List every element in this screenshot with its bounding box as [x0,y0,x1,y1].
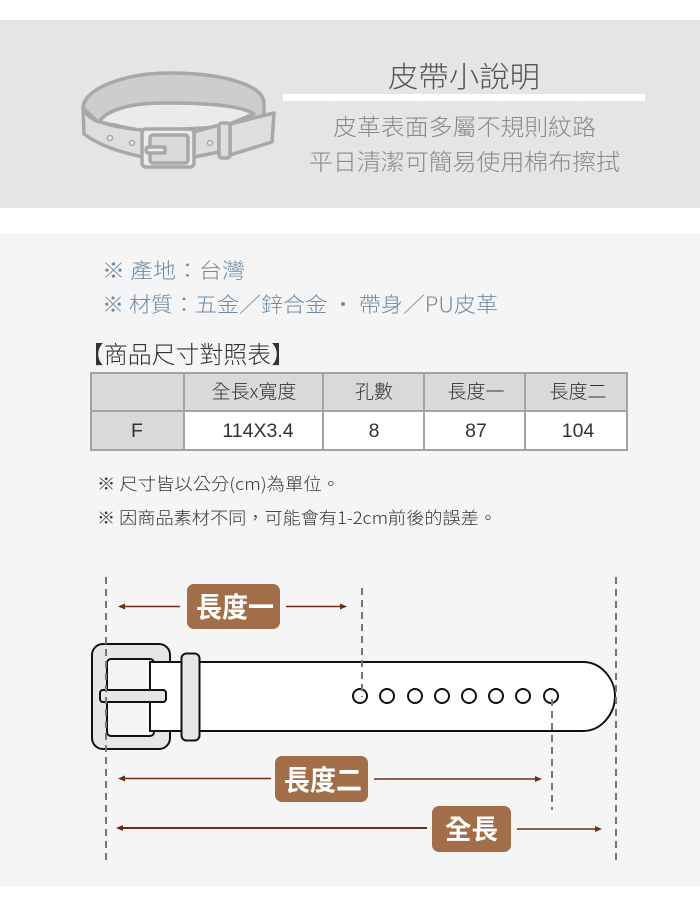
icon: buckle [92,644,170,749]
label: full length [432,806,511,852]
arrow: full length [116,825,602,832]
size table: 孔數 [355,377,393,404]
icon: belt keeper [182,654,200,740]
text block: leather notes [309,108,620,177]
belt measurement diagram [92,577,616,864]
size table: 8 [369,420,379,442]
arrow: length two [118,776,542,782]
icon: belt strap [150,662,615,731]
text block: size notes: ※ 因商品素材不同，可能會有1-2cm前後的誤差。 [97,504,497,529]
arrow: length one [118,604,347,610]
size table: 114X3.4 [222,420,294,442]
text block: leather notes: 平日清潔可簡易使用棉布擦拭 [309,143,620,177]
label: length two: 長度二 [284,765,362,796]
size table: F [131,420,143,442]
heading: belt notes: 皮帶小說明 [388,54,540,96]
size table: 104 [562,420,594,442]
label: length one [187,584,280,629]
label: full length: 全長 [445,815,498,845]
size table: 長度二 [549,377,607,404]
panel: product details [0,234,700,886]
label: length one: 長度一 [196,592,274,623]
panel: header band [0,20,700,208]
text block: leather notes: 皮革表面多屬不規則紋路 [333,108,596,142]
icon: belt holes [353,689,558,703]
text block: origin and material [102,255,498,319]
text block: origin and material: ※ 材質：五金／鋅合金 • 帶身／PU皮革 [102,289,498,319]
label: length two [275,756,368,802]
dashed measurement guides [106,577,616,864]
size table: 87 [465,420,487,442]
heading: size chart: 【商品尺寸對照表】 [80,335,295,370]
size table: 長度一 [447,377,505,404]
text block: origin and material: ※ 產地：台灣 [102,255,245,285]
icon: belt illustration [83,73,274,167]
icon: buckle prong [100,690,166,702]
text block: size notes [97,470,497,529]
size table: 全長x寬度 [212,377,296,404]
text block: size notes: ※ 尺寸皆以公分(cm)為單位。 [97,470,340,495]
size table [91,373,627,450]
